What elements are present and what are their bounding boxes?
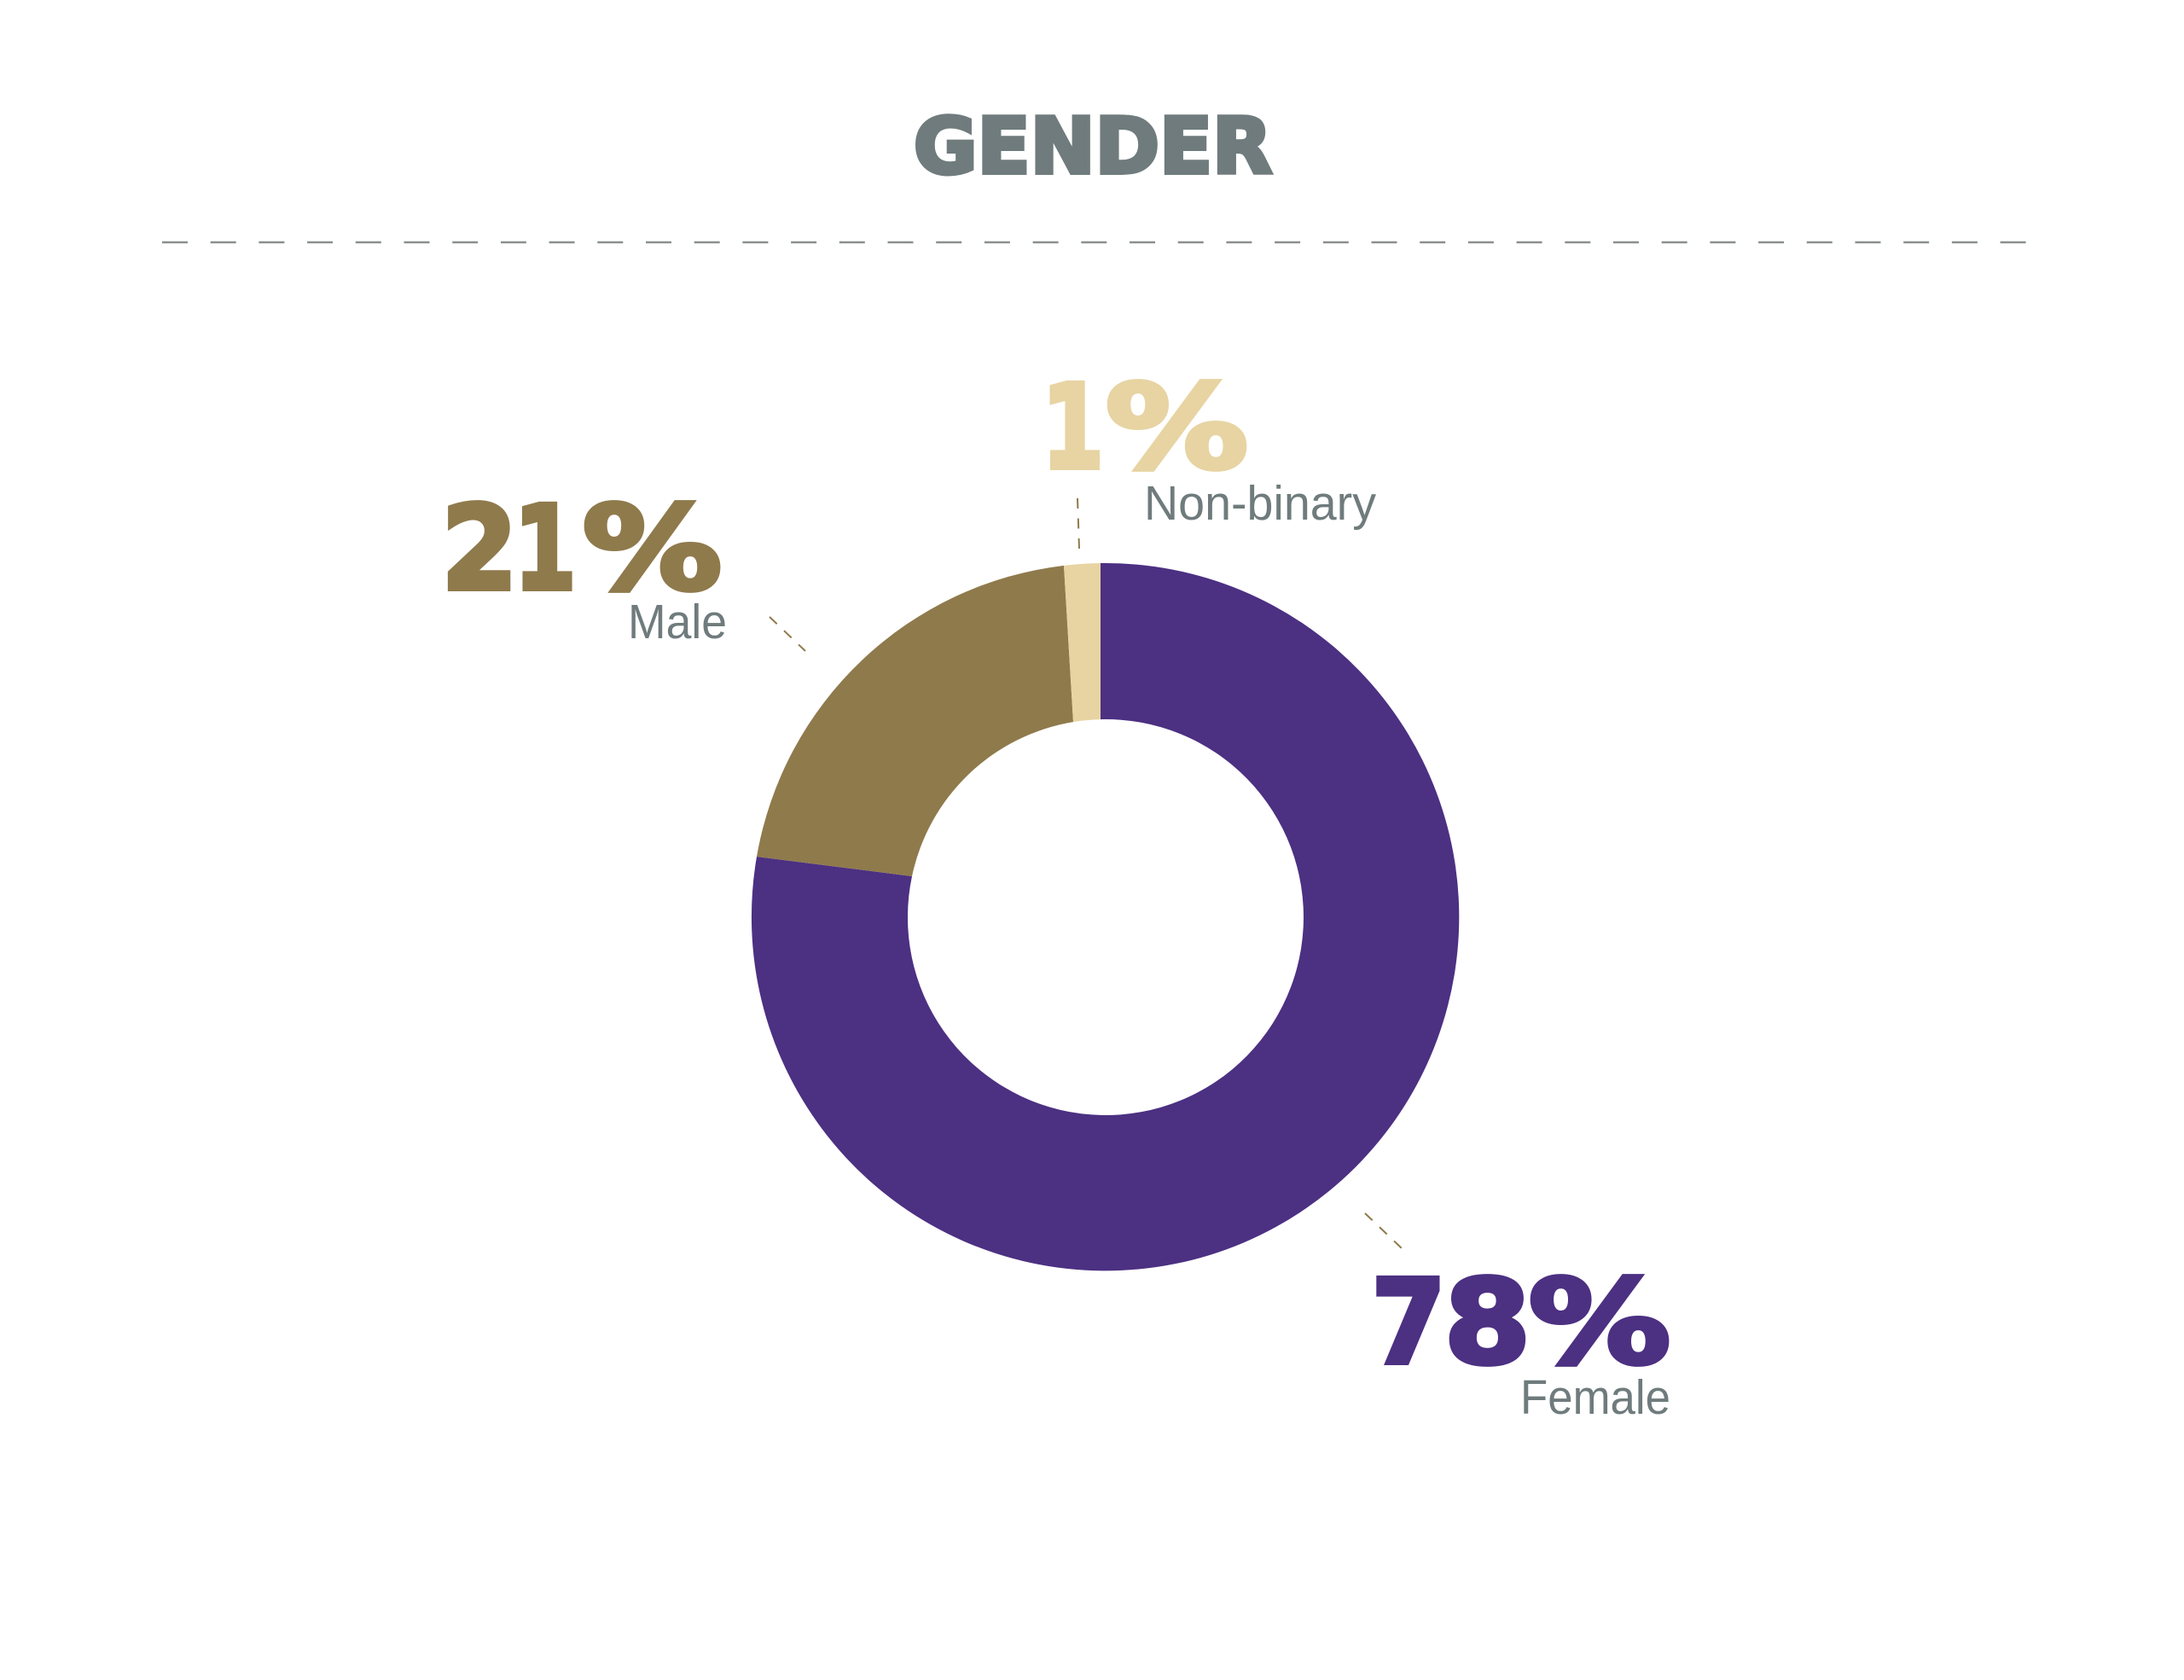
label: Male: Male: [628, 595, 727, 649]
leader line: non-binary: [1077, 498, 1079, 549]
label: Female: Female: [1520, 1370, 1670, 1425]
value: 1%: 1: [1042, 361, 1104, 496]
segment: non-binary 1%: [1064, 563, 1101, 722]
callout: female: [1365, 1213, 1670, 1425]
value: 1%: %: [1106, 361, 1248, 496]
value: 21%: 2: [442, 482, 518, 617]
callout: non-binary: [1042, 361, 1376, 549]
title: GENDER: [914, 102, 1272, 191]
value: 21%: 1: [514, 482, 577, 617]
leader line: female: [1365, 1213, 1402, 1248]
value: 78%: %: [1529, 1256, 1670, 1391]
label: Non-binary: Non-binary: [1144, 476, 1376, 531]
value: 21%: %: [583, 482, 722, 617]
value: 78%: 7: [1372, 1256, 1446, 1391]
leader line: male: [770, 617, 805, 651]
donut chart: [752, 563, 1459, 1270]
segment: female 78%: [752, 563, 1459, 1270]
segment: male 21%: [757, 566, 1073, 876]
callout: male: [442, 482, 805, 651]
value: 78%: 8: [1444, 1256, 1531, 1391]
